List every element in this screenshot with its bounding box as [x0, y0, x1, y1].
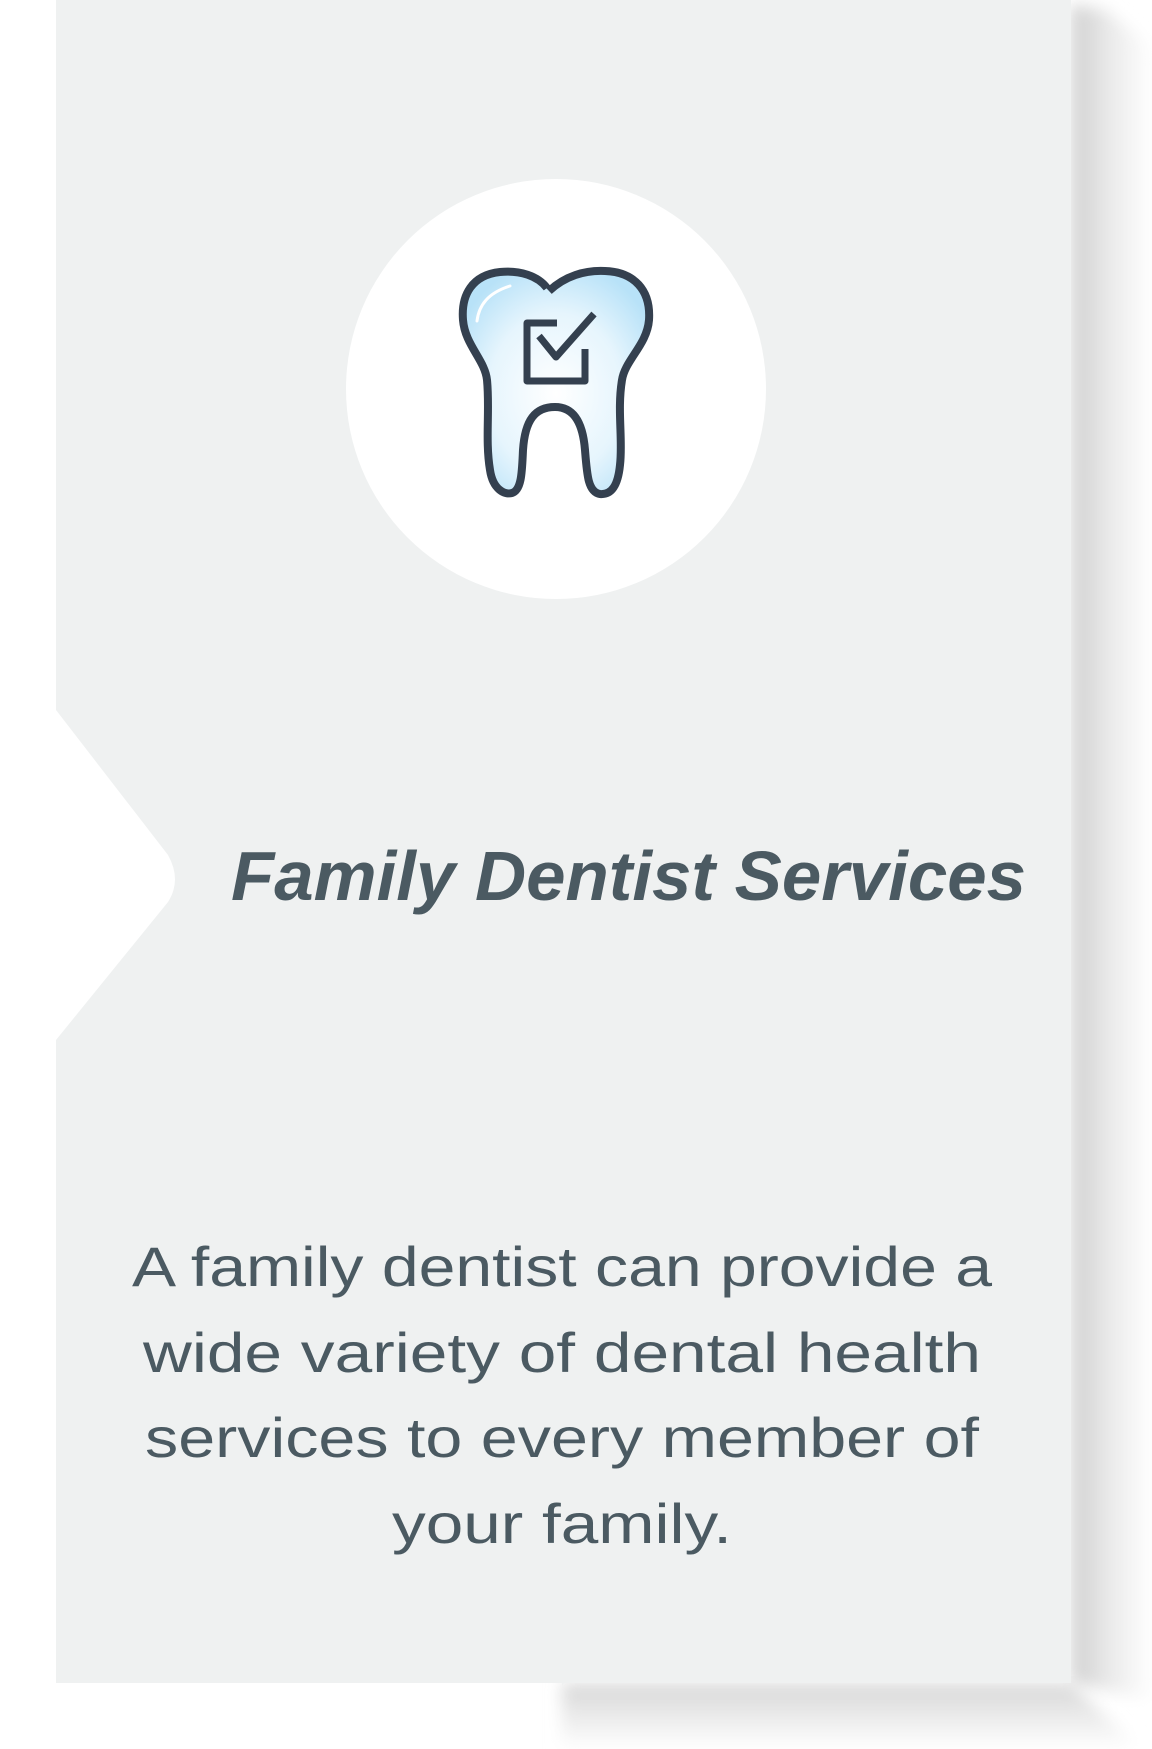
body text: A family dentist can provide a: [132, 1235, 993, 1298]
body text: wide variety of dental health: [142, 1321, 981, 1384]
body text: [132, 1235, 993, 1555]
body text: your family.: [392, 1492, 732, 1555]
body text: services to every member of: [145, 1406, 980, 1469]
shadow: right page shadow: [562, 4, 1152, 1749]
title: Family Dentist Services: [231, 837, 1026, 915]
icon: tooth with checkbox: [463, 271, 649, 494]
icon: white circle: [346, 179, 766, 599]
